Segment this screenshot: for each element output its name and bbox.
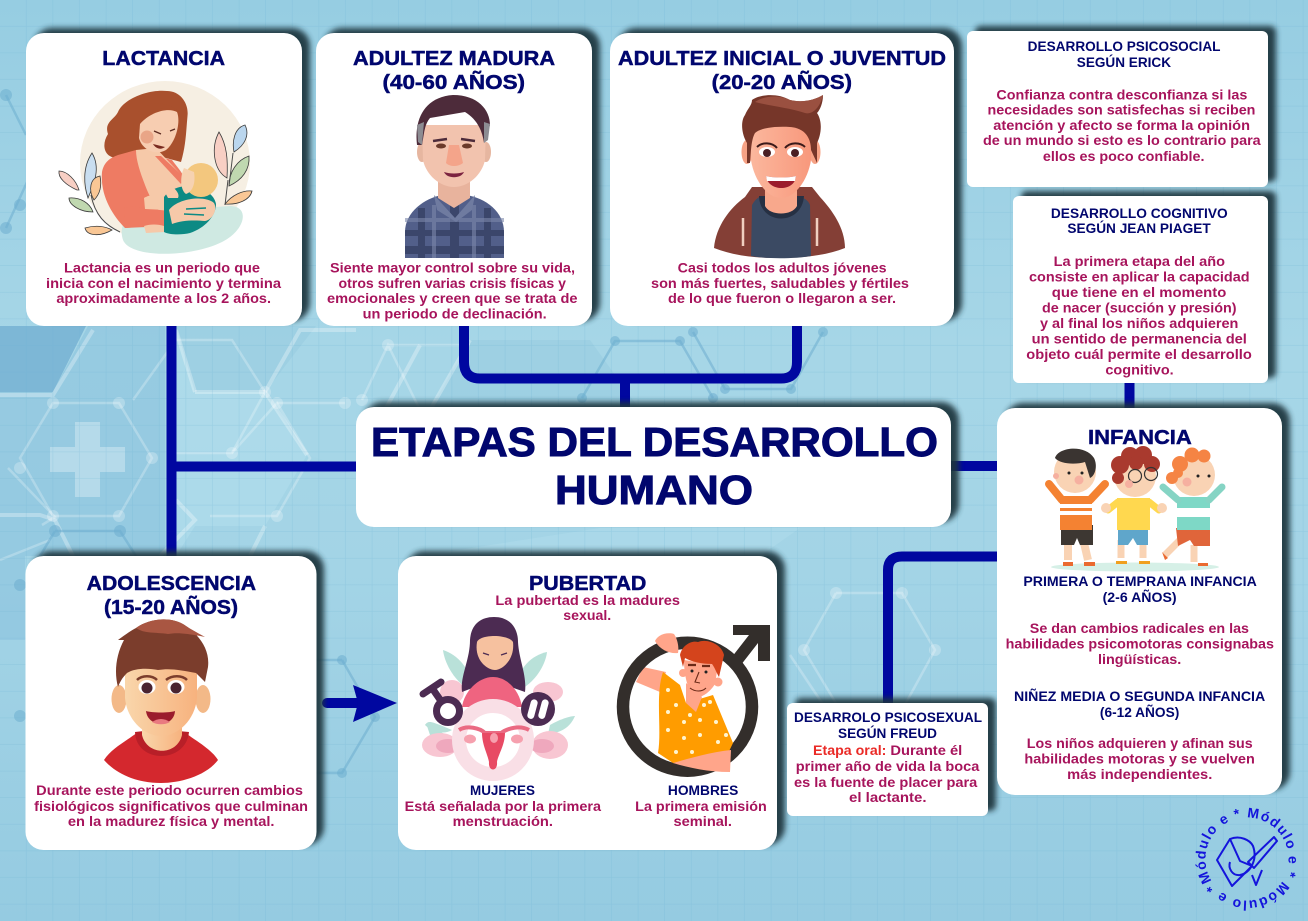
icon: young man bbox=[714, 95, 845, 258]
title bbox=[356, 407, 951, 527]
text: juventud: de lo que fueron o llegaron a ser. bbox=[668, 291, 896, 306]
text: lactancia: inicia con el nacimiento y termina bbox=[46, 276, 281, 291]
heading: adolescencia: ADOLESCENCIA bbox=[87, 572, 256, 595]
heading: psicosexual: DESARROLO PSICOSEXUAL bbox=[794, 710, 982, 725]
text: psicosocial: necesidades son satisfechas si reciben bbox=[988, 102, 1255, 118]
text: psicosexual: primer año de vida la boca bbox=[796, 759, 980, 774]
text: cognitivo: un sentido de permanencia del bbox=[1032, 332, 1247, 346]
text: adolescencia: Durante este periodo ocurren cambios bbox=[36, 783, 303, 798]
heading: psicosocial: DESARROLLO PSICOSOCIAL bbox=[1028, 39, 1220, 54]
text: psicosexual: el lactante. bbox=[849, 790, 926, 805]
text: cognitivo: cognitivo. bbox=[1105, 362, 1174, 378]
heading: adultez madura bbox=[353, 47, 555, 94]
text: psicosocial: Confianza contra desconfianza si las bbox=[996, 87, 1248, 102]
text: primera infancia: habilidades psicomotoras consignabas bbox=[1006, 636, 1274, 652]
icon: three children bbox=[1049, 446, 1222, 572]
text: hombres: La primera emisión bbox=[635, 799, 767, 814]
text: pubertad definition: sexual. bbox=[563, 608, 611, 623]
text: segunda infancia: habilidades motoras y se vuelven bbox=[1024, 752, 1255, 766]
panel: adultez madura bbox=[316, 33, 592, 326]
text: juventud: Casi todos los adultos jóvenes bbox=[678, 260, 887, 276]
text: primera infancia: Se dan cambios radicales en las bbox=[1030, 621, 1249, 636]
heading: psicosexual bbox=[794, 710, 982, 741]
icon: man with male symbol bbox=[623, 625, 770, 772]
panel: lactancia bbox=[26, 33, 302, 326]
icon: teenager bbox=[104, 619, 218, 783]
text: cognitivo: y al final los niños adquieren bbox=[1040, 316, 1238, 331]
text: lactancia bbox=[46, 260, 281, 306]
heading: adolescencia bbox=[87, 572, 256, 619]
heading: infancia: INFANCIA bbox=[1088, 426, 1192, 449]
text: adultez madura: otros sufren varias crisis físicas y bbox=[338, 276, 566, 291]
connector lines bbox=[172, 326, 1130, 704]
text: mujeres: menstruación. bbox=[453, 814, 553, 829]
heading: adolescencia: (15-20 AÑOS) bbox=[104, 596, 238, 619]
text: psicosocial: atención y afecto se forma la opinión bbox=[993, 118, 1250, 133]
text: adolescencia: fisiológicos significativos que culminan bbox=[34, 799, 308, 814]
heading: adultez madura: (40-60 AÑOS) bbox=[382, 71, 525, 94]
text: psicosexual: Etapa oral: bbox=[813, 743, 886, 758]
text: primera infancia bbox=[1006, 574, 1274, 667]
heading: cognitivo: SEGÚN JEAN PIAGET bbox=[1067, 221, 1212, 236]
text: juventud bbox=[651, 260, 909, 306]
panel: desarrollo psicosocial bbox=[967, 31, 1268, 187]
text: primera infancia: (2-6 AÑOS) bbox=[1103, 590, 1177, 605]
text: segunda infancia: (6-12 AÑOS) bbox=[1100, 705, 1179, 720]
text: pubertad definition bbox=[495, 593, 680, 623]
text: pubertad definition: La pubertad es la madures bbox=[495, 593, 680, 608]
heading: cognitivo bbox=[1051, 206, 1228, 236]
panel: adultez inicial o juventud bbox=[610, 33, 954, 326]
text: segunda infancia: Los niños adquieren y afinan sus bbox=[1027, 736, 1253, 751]
text: adultez madura: Siente mayor control sobre su vida, bbox=[330, 260, 575, 276]
title: HUMANO bbox=[555, 467, 753, 513]
text: mujeres: Está señalada por la primera bbox=[405, 799, 601, 814]
icon: mother breastfeeding baby bbox=[59, 81, 252, 254]
text: psicosexual: es la fuente de placer para bbox=[794, 775, 978, 790]
heading: psicosocial bbox=[1028, 39, 1220, 70]
text: psicosexual bbox=[794, 743, 980, 805]
text: psicosocial bbox=[983, 87, 1261, 164]
heading: pubertad: PUBERTAD bbox=[529, 572, 646, 595]
heading: psicosexual: SEGÚN FREUD bbox=[838, 726, 937, 741]
text: primera infancia: lingüísticas. bbox=[1098, 652, 1181, 667]
text: cognitivo: La primera etapa del año bbox=[1054, 254, 1225, 269]
text: hombres: seminal. bbox=[674, 814, 732, 829]
text: hombres bbox=[635, 783, 767, 829]
heading: juventud bbox=[618, 47, 946, 94]
panel: pubertad bbox=[398, 556, 777, 850]
logo: módulo e: Módulo e * Módulo e * Módulo e * bbox=[1195, 808, 1296, 911]
text: adultez madura: emocionales y creen que se trata de bbox=[327, 291, 578, 306]
title: ETAPAS DEL DESARROLLO bbox=[371, 419, 938, 465]
text: cognitivo: que tiene en el momento bbox=[1052, 285, 1226, 300]
text: lactancia: aproximadamente a los 2 años. bbox=[56, 291, 271, 306]
panel: desarrollo cognitivo bbox=[1013, 196, 1268, 383]
text: lactancia: Lactancia es un periodo que bbox=[64, 260, 260, 276]
text: adultez madura: un periodo de declinación. bbox=[363, 306, 547, 322]
text: segunda infancia: más independientes. bbox=[1067, 767, 1212, 782]
heading: cognitivo: DESARROLLO COGNITIVO bbox=[1051, 206, 1228, 221]
text: adultez madura bbox=[327, 260, 578, 322]
panel: infancia bbox=[997, 408, 1282, 795]
text: segunda infancia bbox=[1014, 689, 1266, 782]
text: juventud: son más fuertes, saludables y fértiles bbox=[651, 276, 909, 291]
text: mujeres bbox=[405, 783, 601, 829]
panel: desarrollo psicosexual bbox=[787, 703, 988, 816]
text: adolescencia bbox=[34, 783, 308, 829]
panel: adolescencia bbox=[26, 556, 316, 850]
icon: mature man bbox=[405, 95, 504, 258]
text: psicosocial: ellos es poco confiable. bbox=[1043, 149, 1204, 164]
arrow: adolescencia to pubertad bbox=[322, 685, 397, 722]
text: cognitivo: objeto cuál permite el desarrollo bbox=[1026, 347, 1252, 362]
icon: woman with female symbol and uterus bbox=[422, 617, 575, 774]
heading: juventud: ADULTEZ INICIAL O JUVENTUD bbox=[618, 47, 946, 70]
text: psicosocial: de un mundo si esto es lo contrario para bbox=[983, 133, 1261, 148]
text: segunda infancia: NIÑEZ MEDIA O SEGUNDA INFANCIA bbox=[1014, 689, 1266, 704]
text: adolescencia: en la madurez física y mental. bbox=[68, 814, 275, 829]
heading: adultez madura: ADULTEZ MADURA bbox=[353, 47, 555, 70]
text: hombres: HOMBRES bbox=[668, 783, 738, 798]
heading: juventud: (20-20 AÑOS) bbox=[712, 71, 852, 94]
text: primera infancia: PRIMERA O TEMPRANA INFANCIA bbox=[1023, 574, 1257, 589]
heading: lactancia: LACTANCIA bbox=[102, 47, 225, 70]
heading: psicosocial: SEGÚN ERICK bbox=[1077, 55, 1171, 70]
text: cognitivo: de nacer (succión y presión) bbox=[1042, 300, 1237, 316]
text: cognitivo: consiste en aplicar la capacidad bbox=[1029, 270, 1250, 284]
text: mujeres: MUJERES bbox=[470, 783, 535, 798]
text: cognitivo bbox=[1026, 254, 1252, 378]
text: psicosexual: Durante él bbox=[890, 743, 962, 758]
